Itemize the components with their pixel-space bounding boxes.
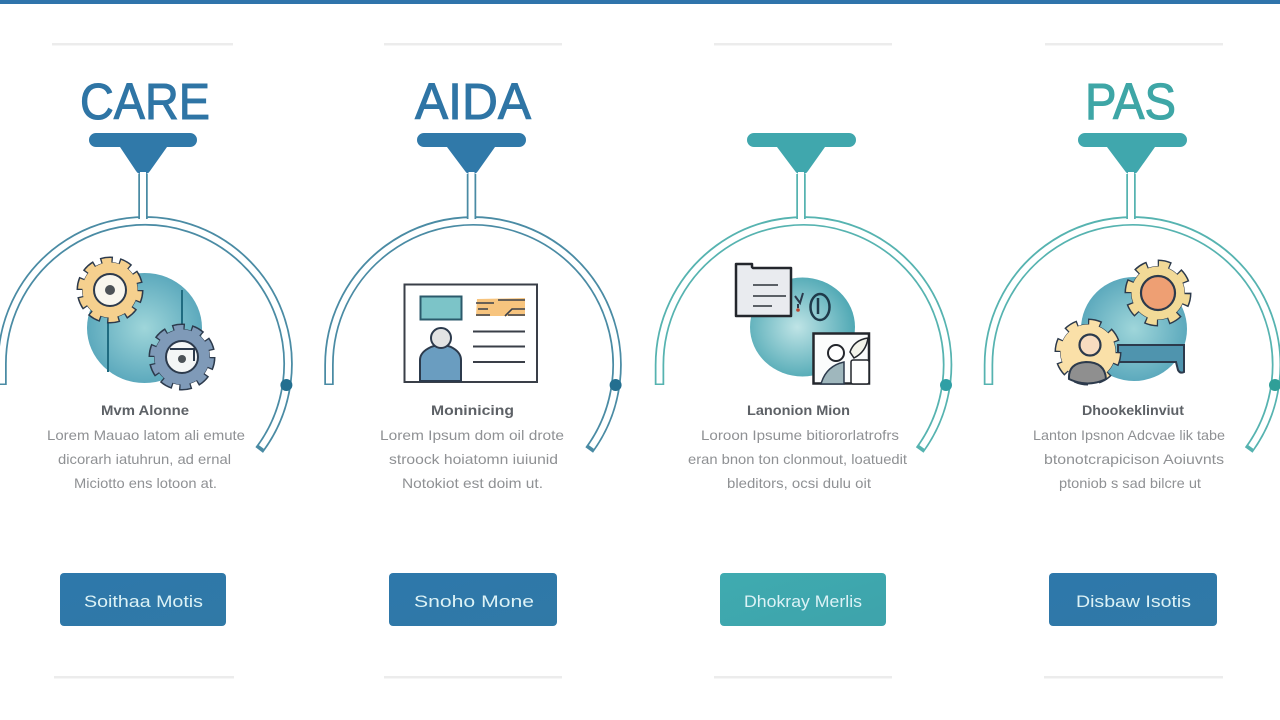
arc frame bbox=[329, 172, 617, 450]
panel: CARE bbox=[2, 73, 292, 626]
funnel connector bbox=[89, 133, 197, 174]
icon: profile card bbox=[404, 284, 537, 382]
text block bbox=[47, 402, 245, 491]
panel: PAS bbox=[988, 73, 1280, 626]
text block: Dhookeklinviut bbox=[1082, 402, 1184, 418]
text block: bleditors, ocsi dulu oit bbox=[727, 475, 871, 491]
text block bbox=[380, 402, 564, 491]
funnel connector bbox=[747, 133, 856, 174]
heading: AIDA: AIDA bbox=[415, 73, 531, 130]
text block: ptoniob s sad bilcre ut bbox=[1059, 475, 1201, 491]
text block: Lanton Ipsnon Adcvae lik tabe bbox=[1033, 427, 1225, 443]
icon: gears, person and wrench bbox=[1060, 266, 1187, 384]
arc marker dot bbox=[610, 379, 622, 391]
button: Disbaw Isotis bbox=[1076, 592, 1191, 611]
arc marker dot bbox=[280, 379, 292, 391]
arc marker dot bbox=[940, 379, 952, 391]
heading: CARE: CARE bbox=[80, 73, 210, 130]
panel: third column bbox=[660, 133, 952, 626]
text block: Notokiot est doim ut. bbox=[402, 475, 543, 491]
arc frame bbox=[988, 172, 1276, 450]
text block: Lanonion Mion bbox=[747, 402, 850, 418]
heading: PAS: PAS bbox=[1085, 73, 1176, 130]
text block: Lorem Ipsum dom oil drote bbox=[380, 427, 564, 443]
text block: Moninicing bbox=[431, 402, 514, 418]
icon: gears on globe bbox=[82, 262, 210, 385]
text block: Lorem Mauao latom ali emute bbox=[47, 427, 245, 443]
button: Dhokray Merlis bbox=[744, 592, 862, 611]
button bbox=[60, 573, 226, 626]
top accent bar bbox=[0, 0, 1280, 4]
button bbox=[1049, 573, 1217, 626]
panel: AIDA bbox=[329, 73, 622, 626]
button bbox=[720, 573, 886, 626]
text block: Mvm Alonne bbox=[101, 402, 189, 418]
button: Soithaa Motis bbox=[84, 592, 203, 611]
text block: Loroon Ipsume bitiororlatrofrs bbox=[701, 427, 899, 443]
text block: eran bnon ton clonmout, loatuedit bbox=[688, 451, 907, 467]
text block bbox=[688, 402, 907, 491]
button bbox=[389, 573, 557, 626]
funnel connector bbox=[417, 133, 526, 174]
button: Snoho Mone bbox=[414, 592, 534, 611]
text block: dicorarh iatuhrun, ad ernal bbox=[58, 451, 231, 467]
text block: Miciotto ens lotoon at. bbox=[74, 475, 217, 491]
arc frame bbox=[660, 172, 948, 450]
text block: btonotcrapicison Aoiuvnts bbox=[1044, 451, 1224, 467]
icon: documents on globe bbox=[736, 264, 869, 384]
arc marker dot bbox=[1269, 379, 1280, 391]
funnel connector bbox=[1078, 133, 1187, 174]
arc frame bbox=[2, 172, 288, 450]
text block bbox=[1033, 402, 1225, 491]
text block: stroock hoiatomn iuiunid bbox=[389, 451, 558, 467]
